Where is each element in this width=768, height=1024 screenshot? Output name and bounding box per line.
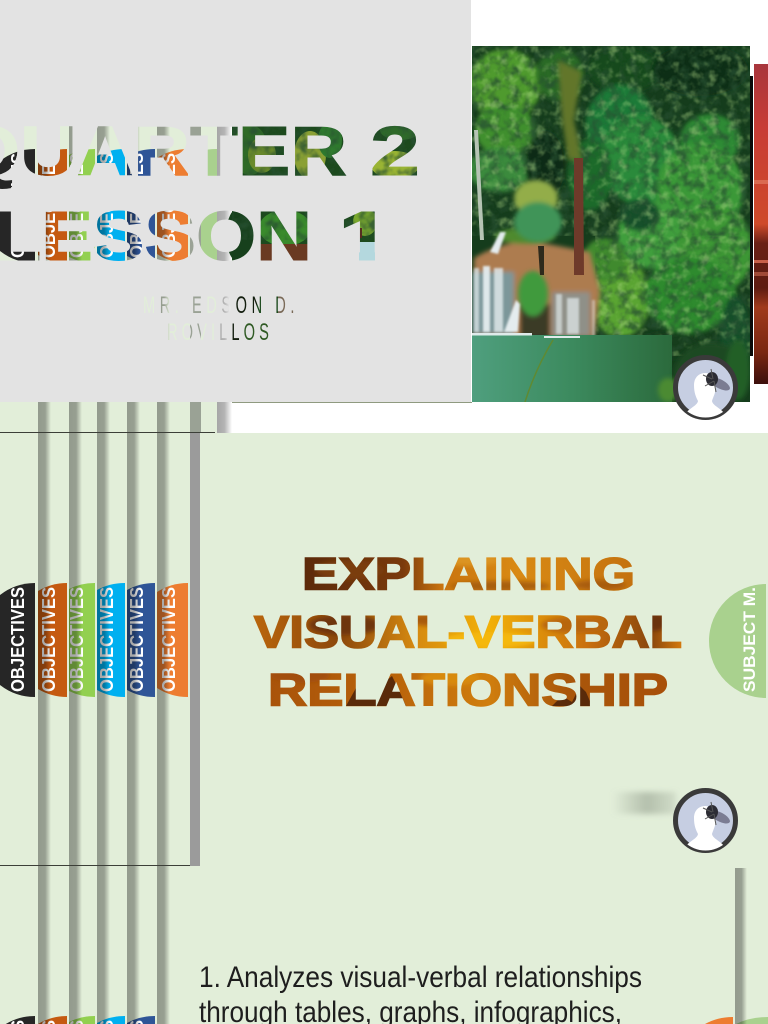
photo dark edge <box>750 76 753 356</box>
avatar shadow <box>612 792 676 814</box>
rock ledge <box>472 228 600 338</box>
icon: fly <box>703 802 732 826</box>
panel: forest photo <box>468 44 753 407</box>
title: Quarter 2 Lesson 1 <box>0 112 420 275</box>
tree with yellow crown <box>514 60 582 317</box>
waterfall <box>474 232 595 336</box>
title: Explaining Visual-Verbal Relationship: VISUAL-VERBAL <box>254 606 682 658</box>
panel: hidden strip under cover slide <box>0 400 232 433</box>
slide edge line <box>0 432 215 433</box>
avatar: cover slide profile <box>676 358 736 420</box>
avatar: second slide profile <box>676 790 736 853</box>
title: Quarter 2 Lesson 1: 1 <box>338 197 392 275</box>
title: Explaining Visual-Verbal Relationship <box>254 548 682 716</box>
objectives tabs <box>0 583 188 697</box>
tab: subject M.: SUBJECT M. <box>740 587 759 692</box>
tab: subject M. <box>709 584 766 698</box>
panel: cover slide gray <box>0 0 472 403</box>
title: Quarter 2 Lesson 1: 2 <box>370 112 420 190</box>
panel: sunset photo strip <box>754 64 768 384</box>
foreground foliage <box>658 340 750 407</box>
teacher name <box>143 292 299 346</box>
vertical band shadows <box>38 433 200 866</box>
icon: fly <box>703 369 732 393</box>
pond <box>472 333 672 402</box>
title: Quarter 2 Lesson 1: LESSON <box>0 197 312 275</box>
teacher name: MR. EDSON D. <box>143 292 299 319</box>
tree trunk <box>574 158 584 275</box>
panel: third slide <box>0 866 768 1024</box>
right band and tabs <box>705 868 768 1024</box>
objectives tabs cropped <box>6 866 170 1024</box>
objective text <box>199 961 642 1024</box>
title: Explaining Visual-Verbal Relationship: EXPLAINING <box>302 548 635 600</box>
teacher name: ROVILLOS <box>167 319 273 346</box>
title: Explaining Visual-Verbal Relationship: RELATIONSHIP <box>268 664 668 716</box>
foliage texture <box>472 46 750 356</box>
numeral foot cover <box>330 250 395 264</box>
panel: second slide <box>0 432 768 866</box>
